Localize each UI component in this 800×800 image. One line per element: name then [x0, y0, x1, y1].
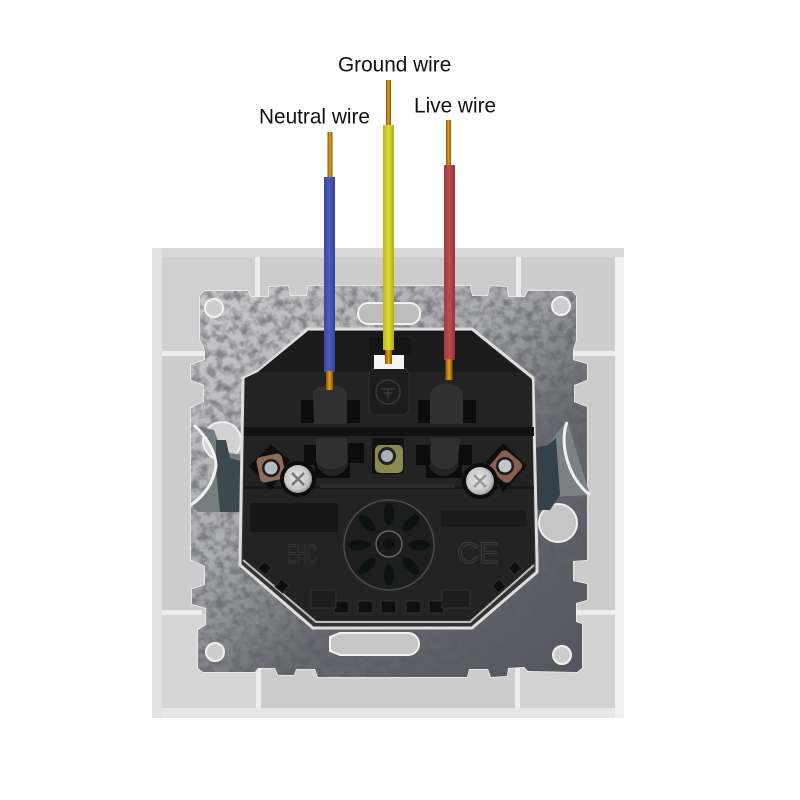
CE mark: CE — [457, 537, 499, 570]
bottom silver chamfer — [243, 560, 534, 622]
ridge band — [244, 427, 534, 436]
label: live wire: Live wire — [414, 94, 496, 118]
ground wire — [383, 80, 394, 364]
right spring clip — [532, 420, 590, 510]
left spring clip — [191, 425, 245, 512]
left terminal — [249, 445, 290, 490]
neutral socket — [301, 385, 364, 478]
mounting holes — [205, 297, 571, 664]
label: ground wire: Ground wire — [338, 54, 451, 76]
right terminal — [486, 443, 527, 492]
body upper — [243, 331, 534, 620]
label: neutral wire: Neutral wire — [259, 106, 370, 128]
body outline — [240, 329, 537, 628]
right screw — [462, 463, 498, 499]
center terminal screw — [372, 438, 404, 474]
left screw — [280, 461, 316, 497]
ground terminal — [369, 338, 411, 415]
wall plate frame — [152, 248, 624, 718]
EAC mark: EHC — [287, 539, 317, 569]
bottom slots — [258, 561, 522, 613]
socket body — [240, 329, 537, 628]
label plates — [250, 503, 526, 532]
neutral wire — [324, 132, 335, 390]
live wire — [444, 120, 455, 380]
socket wiring diagram — [152, 56, 624, 718]
metal mounting plate — [185, 280, 595, 685]
live socket — [416, 384, 476, 478]
round knockout — [344, 500, 434, 590]
